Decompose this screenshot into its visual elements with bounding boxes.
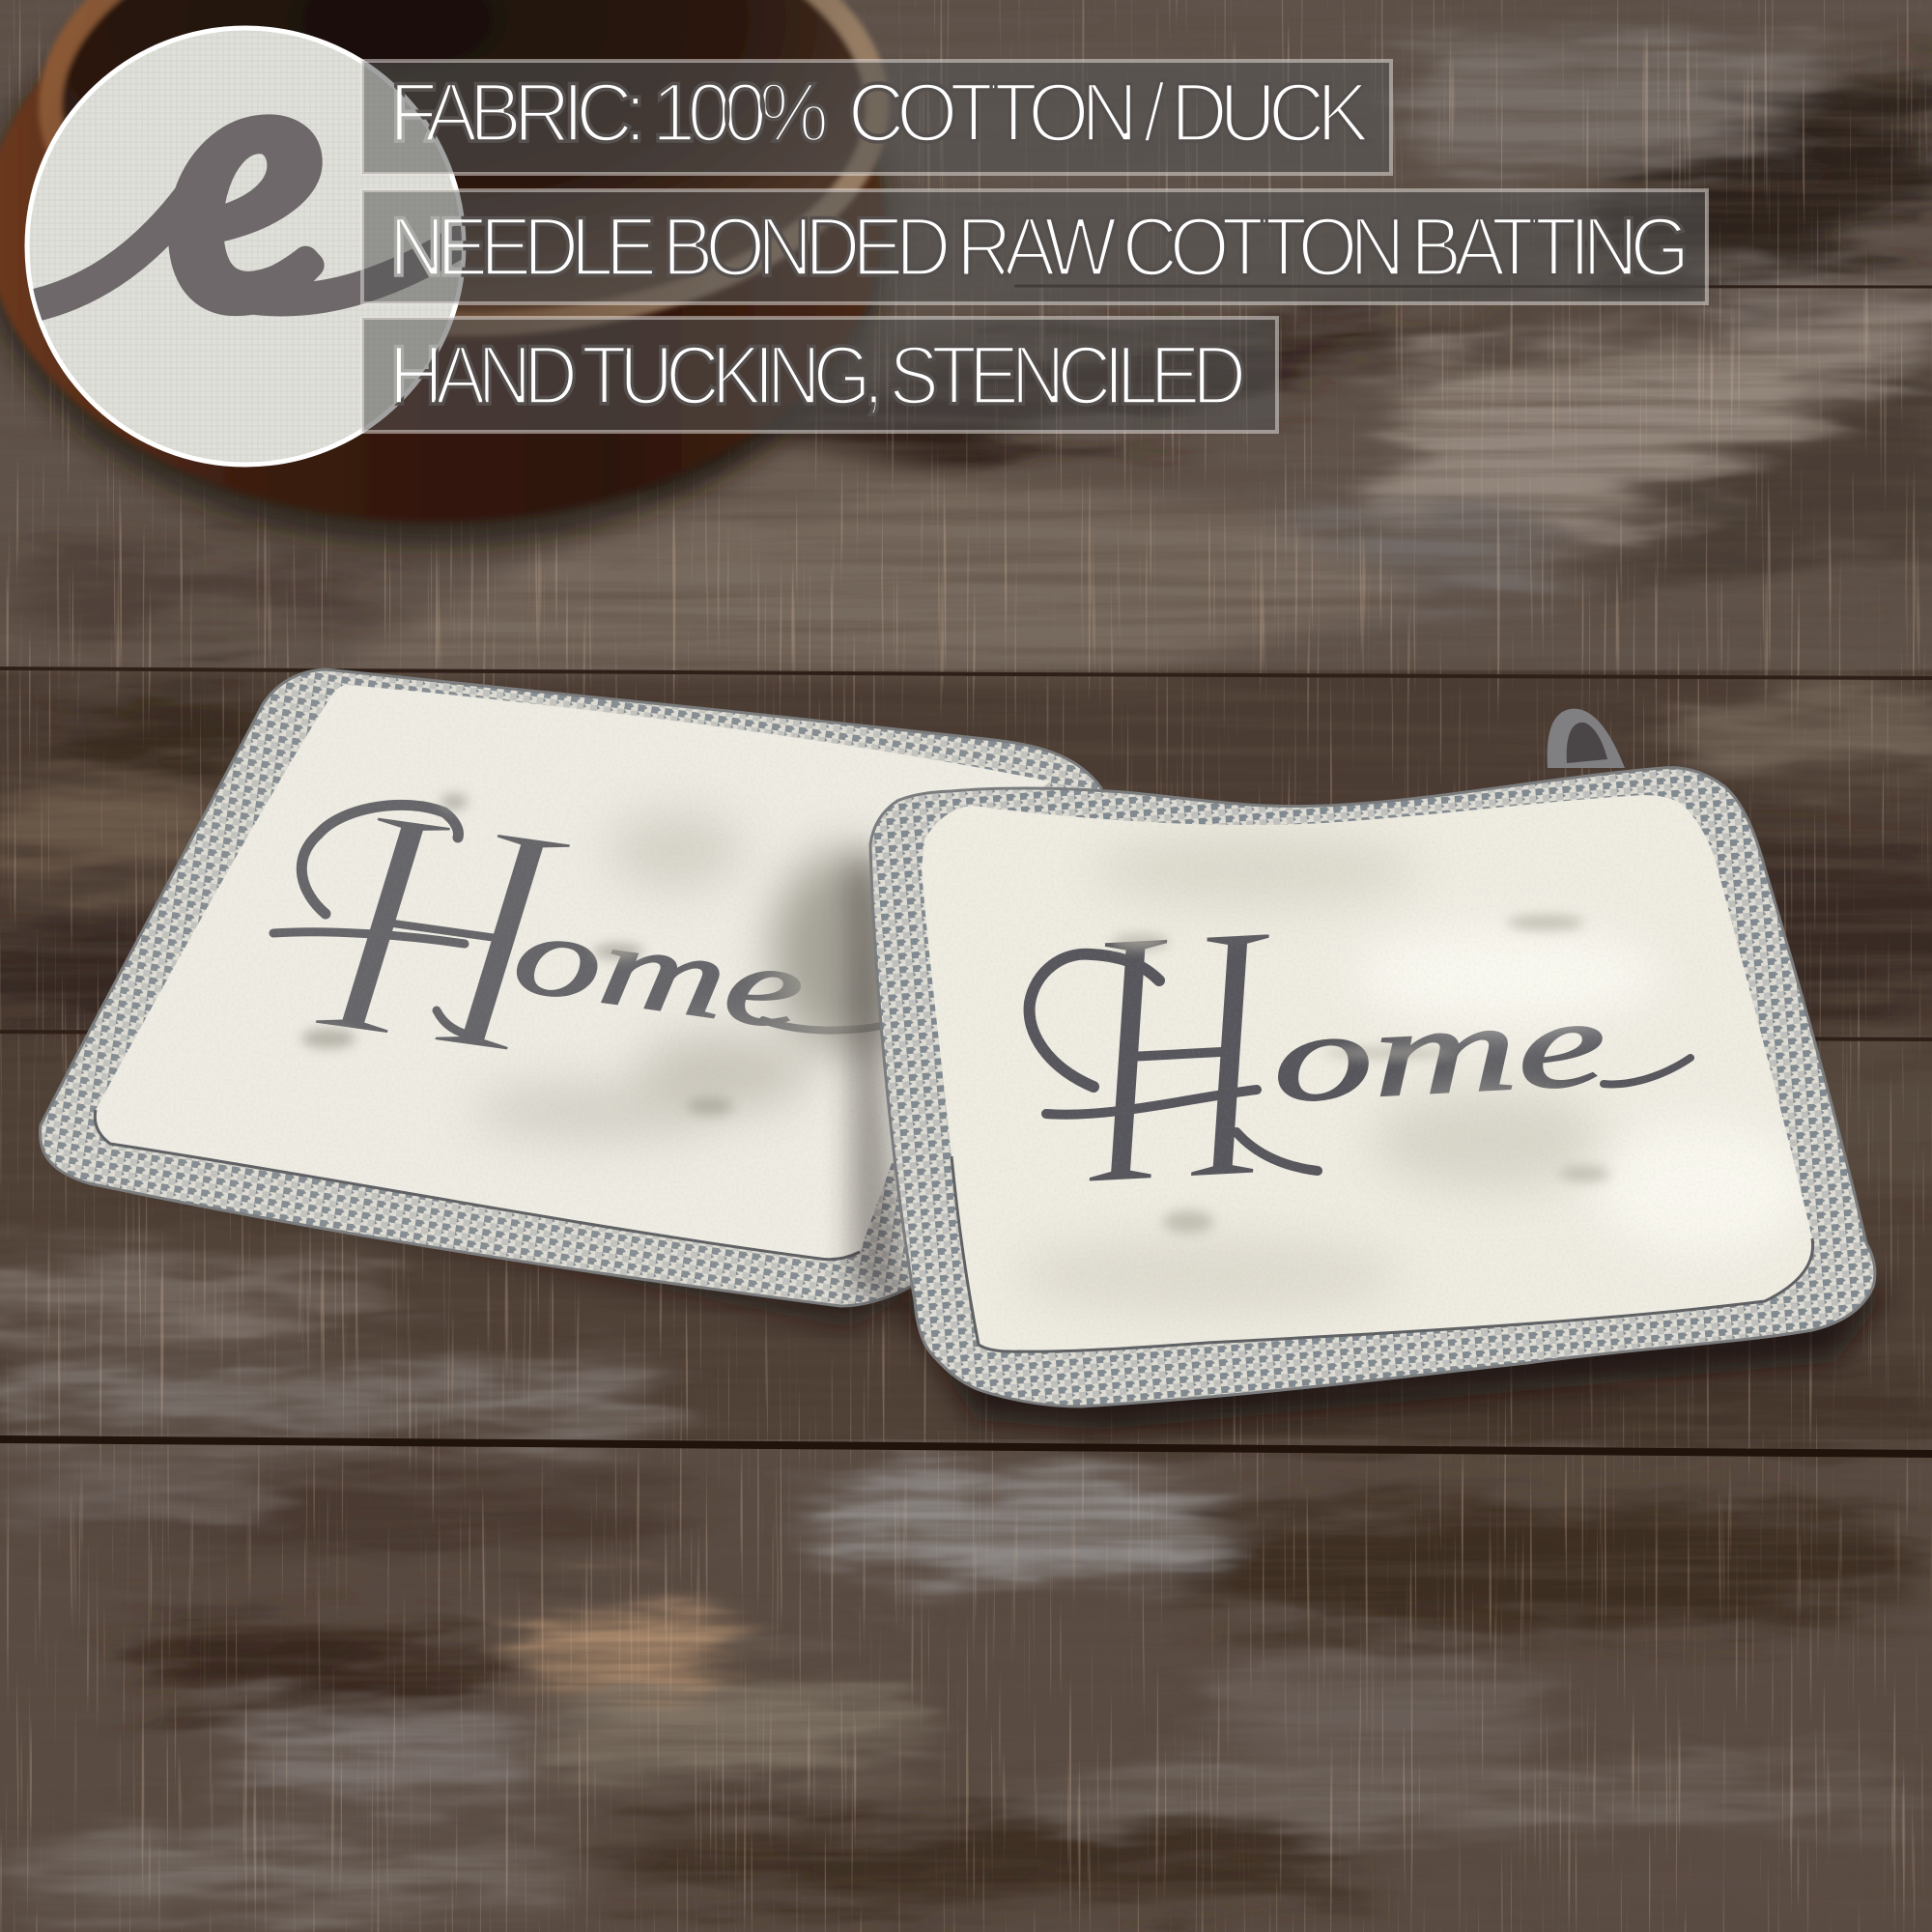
right holder printed Home: ome: [1269, 974, 1609, 1128]
left holder cream fabric: [96, 685, 1049, 1258]
right holder shadow: [898, 1285, 1893, 1430]
callout bars: [362, 61, 1707, 432]
left holder printed Home: [269, 800, 880, 1049]
left holder gingham border: [41, 669, 1101, 1306]
left holder printed Home: ome: [507, 889, 811, 1054]
right holder printed Home: [1030, 827, 1690, 1265]
sun-lit diagonal wedge: [328, 435, 1430, 670]
quilting dimples: [1111, 915, 1609, 1234]
right holder printed Home: H: [1068, 844, 1293, 1265]
macro print of script letter: [27, 0, 483, 386]
right holder cream fabric: [908, 782, 1835, 1362]
detail circle: fabric close-up: [27, 0, 483, 465]
right Home flourishes: [1030, 954, 1690, 1171]
pot holder: left: [41, 667, 1101, 1328]
left Home flourishes: [273, 805, 881, 1037]
callout: fabric: FABRIC: 100% COTTON / DUCK: [389, 67, 1369, 159]
left holder shadow: [58, 1164, 927, 1328]
plank seams: [0, 286, 1932, 1454]
hanging loop: [1548, 709, 1625, 768]
wooden bowl: [0, 0, 889, 546]
pot holder: right: [850, 709, 1893, 1430]
callout: batting: NEEDLE BONDED RAW COTTON BATTING: [389, 201, 1685, 294]
quilting dimples: [301, 794, 733, 1115]
callout: construction: HAND TUCKING, STENCILED: [389, 329, 1242, 422]
right holder gingham border: [870, 768, 1875, 1406]
left holder printed Home: H: [300, 731, 589, 1130]
